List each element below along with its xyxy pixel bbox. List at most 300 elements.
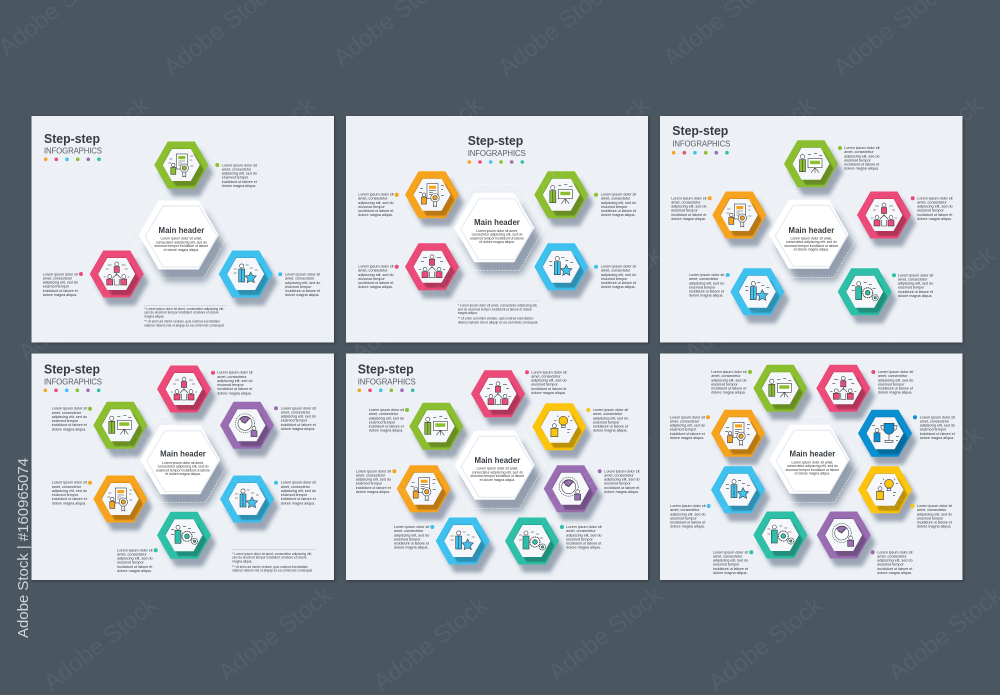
callout: pink — [43, 272, 83, 297]
callout: pink: eiusmod tempor — [358, 277, 386, 281]
main hexagon: et dolore magna aliqua. — [164, 248, 199, 252]
callout: orange: eiusmod tempor — [671, 209, 699, 213]
main hexagon: Lorem ipsum dolor sit amet, — [162, 461, 204, 465]
callout: pink: Lorem ipsum dolor sit — [531, 370, 567, 374]
footnote: magna aliqua. — [458, 311, 478, 315]
callout: yellow: Lorem ipsum dolor sit — [593, 408, 628, 412]
main hexagon: eiusmod tempor incididunt ut labore — [156, 469, 210, 473]
callout: green: incididunt ut labore et — [222, 180, 257, 184]
callout: purple: adipiscing elit, sed do — [281, 415, 316, 419]
callout: blue: eiusmod tempor — [281, 493, 308, 497]
hexagon: yellow bulb — [532, 403, 591, 458]
callout: yellow: amet, consectetur — [917, 508, 947, 512]
main hexagon: eiusmod tempor incididunt ut labore — [471, 474, 524, 478]
callout: teal: dolore magna aliqua. — [898, 294, 932, 298]
callout: blue: Lorem ipsum dolor sit — [670, 504, 706, 508]
footnote: magna aliqua. — [232, 559, 252, 563]
callout: blue: Lorem ipsum dolor sit — [394, 525, 429, 529]
callout: pink: dolore magna aliqua. — [878, 391, 912, 395]
watermark: Adobe Stock — [696, 421, 821, 527]
callout: blue — [274, 481, 316, 505]
hexagon: orange certificate — [711, 410, 770, 465]
panel: seven steps — [346, 354, 648, 580]
callout: yellow: Lorem ipsum dolor sit — [917, 504, 952, 508]
callout: orange: Lorem ipsum dolor sit — [670, 415, 705, 419]
callout: blue — [594, 265, 636, 289]
callout: pink: Lorem ipsum dolor sit — [917, 196, 953, 200]
watermark: Adobe Stock — [30, 421, 155, 527]
callout: green: incididunt ut labore et — [52, 423, 87, 427]
callout: yellow: amet, consectetur — [593, 412, 623, 416]
callout: blue: Lorem ipsum dolor sit — [601, 265, 636, 269]
callout: green — [215, 163, 257, 188]
callout: blue: incididunt ut labore et — [601, 281, 636, 285]
main hexagon: consectetur adipiscing elit, sed do — [787, 464, 838, 468]
hexagon: green presentation — [753, 365, 812, 420]
callout: teal: eiusmod tempor — [713, 563, 740, 567]
callout: green: eiusmod tempor — [222, 176, 249, 180]
main hexagon: consectetur adipiscing elit, sed do — [786, 240, 837, 244]
hexagon: orange certificate — [93, 476, 152, 530]
callout: teal: amet, consectetur — [898, 277, 928, 281]
hexagon: teal gears — [838, 268, 897, 323]
watermark: Adobe Stock — [213, 581, 338, 687]
callout: purple: incididunt ut labore et — [281, 423, 316, 427]
callout: teal: adipiscing elit, sed do — [713, 559, 748, 563]
hexagon: green presentation — [534, 171, 593, 226]
footnote: ullamco laboris nisi ut aliquip ex ea commodo consequat. — [232, 568, 313, 572]
footnote: * Lorem ipsum dolor sit amet, consectetur adipiscing elit, — [144, 307, 224, 311]
main hexagon: eiusmod tempor incididunt ut labore — [155, 244, 208, 248]
callout: blue: dolore magna aliqua. — [689, 294, 723, 298]
watermark: Adobe Stock — [346, 261, 471, 367]
callout: blue: adipiscing elit, sed do — [281, 489, 316, 493]
callout: teal: eiusmod tempor — [566, 537, 594, 541]
callout: dark blue: dolore magna aliqua. — [920, 436, 954, 440]
callout: green — [52, 407, 92, 431]
watermark: Adobe Stock — [863, 91, 988, 197]
callout: blue: incididunt ut labore et — [285, 289, 320, 293]
callout: yellow: adipiscing elit, sed do — [917, 512, 952, 516]
colour dots — [358, 388, 415, 392]
callout: green: adipiscing elit, sed do — [52, 415, 87, 419]
callout: green: eiusmod tempor — [711, 382, 739, 386]
callout: teal: Lorem ipsum dolor sit — [898, 273, 933, 277]
hexagon: pink team — [90, 250, 149, 306]
callout: green: adipiscing elit, sed do — [369, 416, 404, 420]
callout: teal: eiusmod tempor — [898, 286, 925, 290]
callout: dark blue: amet, consectetur — [920, 419, 950, 423]
callout: orange: dolore magna aliqua. — [670, 436, 704, 440]
watermark: Adobe Stock — [196, 421, 321, 527]
callout: pink: amet, consectetur — [358, 269, 388, 273]
colour dots — [44, 388, 100, 392]
footnote: ** Ut enim ad minim veniam, quis nostrud exercitation — [144, 320, 220, 324]
callout: orange: amet, consectetur — [52, 485, 82, 489]
footnote: sed do eiusmod tempor incididunt ut labore et dolore — [144, 311, 219, 315]
callout: pink: amet, consectetur — [917, 200, 947, 204]
callout: green: dolore magna aliqua. — [222, 184, 256, 188]
callout: blue: adipiscing elit, sed do — [601, 273, 636, 277]
callout: orange: incididunt ut labore et — [358, 209, 393, 213]
watermark: Adobe Stock — [30, 91, 155, 197]
footnote: ** Ut enim ad minim veniam, quis nostrud exercitation — [458, 317, 534, 321]
callout: pink: eiusmod tempor — [917, 209, 945, 213]
callout: blue — [670, 504, 711, 529]
callout: green: adipiscing elit, sed do — [222, 172, 257, 176]
watermark: Adobe Stock — [530, 421, 655, 527]
main hexagon: et dolore magna aliqua. — [795, 472, 830, 476]
callout: pink: eiusmod tempor — [217, 383, 245, 387]
hexagon: blue star — [219, 250, 278, 306]
footnote — [458, 301, 540, 325]
callout: orange: amet, consectetur — [671, 200, 701, 204]
callout: orange: eiusmod tempor — [356, 482, 383, 486]
callout: orange: Lorem ipsum dolor sit — [358, 193, 394, 197]
callout: pink: dolore magna aliqua. — [358, 285, 393, 289]
callout: orange: amet, consectetur — [358, 197, 388, 201]
callout: blue: dolore magna aliqua. — [670, 525, 705, 529]
colour dots — [44, 158, 101, 161]
callout: blue: adipiscing elit, sed do — [689, 281, 724, 285]
callout: green: dolore magna aliqua. — [369, 429, 403, 433]
callout: green: Lorem ipsum dolor sit — [52, 407, 87, 411]
main hexagon: et dolore magna aliqua. — [794, 248, 829, 252]
callout: blue: amet, consectetur — [394, 529, 424, 533]
callout: teal: incididunt ut labore et — [713, 567, 748, 571]
callout: teal: dolore magna aliqua. — [713, 571, 747, 575]
watermark: Adobe Stock — [696, 91, 821, 197]
hexagon: orange certificate — [405, 171, 464, 226]
callout: pink: amet, consectetur — [531, 374, 561, 378]
callout: teal — [560, 525, 602, 550]
callout: purple: adipiscing elit, sed do — [877, 559, 913, 563]
main hexagon: Lorem ipsum dolor sit amet, — [791, 460, 833, 464]
main hexagon: et dolore magna aliqua. — [479, 240, 515, 244]
watermark: Adobe Stock — [530, 91, 655, 197]
callout: green: Lorem ipsum dolor sit — [369, 408, 404, 412]
callout: pink — [525, 370, 567, 395]
side credit: Adobe Stock | #160965074 — [15, 458, 32, 638]
callout: pink: amet, consectetur — [43, 276, 73, 280]
callout: orange — [671, 196, 712, 221]
hexagon: pink team — [816, 365, 875, 420]
callout: pink: adipiscing elit, sed do — [917, 205, 953, 209]
panel: three steps — [32, 116, 334, 342]
callout: purple: amet, consectetur — [604, 473, 634, 477]
callout: orange: adipiscing elit, sed do — [671, 205, 707, 209]
footnote — [232, 549, 316, 572]
callout: blue: adipiscing elit, sed do — [394, 533, 429, 537]
main hexagon: Main header — [159, 226, 204, 235]
callout: blue: eiusmod tempor — [285, 285, 312, 289]
callout: orange: adipiscing elit, sed do — [356, 478, 391, 482]
callout: yellow — [910, 504, 952, 529]
callout: pink: eiusmod tempor — [43, 285, 70, 289]
callout: orange — [358, 193, 399, 217]
callout: orange: amet, consectetur — [670, 419, 700, 423]
callout: orange: adipiscing elit, sed do — [670, 424, 705, 428]
callout: green: Lorem ipsum dolor sit — [844, 146, 880, 150]
heading: Step-step — [44, 131, 100, 146]
callout: pink: adipiscing elit, sed do — [43, 281, 78, 285]
main hexagon: eiusmod tempor incididunt ut labore — [786, 468, 839, 472]
hexagon: blue star — [220, 476, 279, 530]
callout: green: adipiscing elit, sed do — [601, 201, 636, 205]
watermark: Adobe Stock — [363, 91, 488, 197]
callout: blue: amet, consectetur — [670, 508, 700, 512]
heading: INFOGRAPHICS — [44, 147, 102, 156]
hexagon: purple clock — [220, 402, 279, 457]
callout: green — [838, 146, 880, 171]
footnote: sed do eiusmod tempor incididunt ut labore et dolore — [458, 307, 532, 311]
callout: blue: Lorem ipsum dolor sit — [285, 273, 320, 277]
footnote: ** Ut enim ad minim veniam, quis nostrud exercitation — [232, 565, 308, 569]
callout: pink: adipiscing elit, sed do — [217, 379, 253, 383]
callout: green: incididunt ut labore et — [369, 425, 404, 429]
callout: purple — [871, 550, 913, 575]
callout: orange: dolore magna aliqua. — [52, 501, 86, 505]
callout: blue: Lorem ipsum dolor sit — [689, 273, 724, 277]
main hexagon: et dolore magna aliqua. — [165, 472, 201, 476]
callout: orange: incididunt ut labore et — [356, 486, 391, 490]
callout: blue — [689, 273, 730, 298]
callout: pink: dolore magna aliqua. — [531, 391, 566, 395]
callout: blue: dolore magna aliqua. — [394, 546, 428, 550]
watermark: Adobe Stock — [210, 241, 335, 347]
main hexagon: eiusmod tempor incididunt ut labore — [785, 244, 838, 248]
callout: green: eiusmod tempor — [844, 158, 872, 162]
callout: pink: incididunt ut labore et — [43, 289, 78, 293]
callout: purple: dolore magna aliqua. — [877, 571, 912, 575]
callout: pink: incididunt ut labore et — [531, 387, 566, 391]
hexagon: pink team — [157, 366, 216, 420]
panel: five steps — [660, 116, 962, 342]
callout: green: adipiscing elit, sed do — [711, 378, 747, 382]
watermark: Adobe Stock — [543, 241, 668, 347]
callout: purple: eiusmod tempor — [281, 419, 308, 423]
callout: green: incididunt ut labore et — [844, 163, 879, 167]
hexagon: pink team — [857, 192, 916, 246]
callout: teal: adipiscing elit, sed do — [898, 282, 933, 286]
hexagon: blue star — [534, 243, 593, 298]
callout: green: amet, consectetur — [222, 167, 252, 171]
callout: teal: Lorem ipsum dolor sit — [713, 550, 748, 554]
watermark: Adobe Stock — [679, 261, 804, 367]
callout: green: incididunt ut labore et — [711, 387, 746, 391]
callout: green: dolore magna aliqua. — [711, 391, 746, 395]
callout: teal — [713, 550, 753, 575]
heading: INFOGRAPHICS — [468, 149, 526, 158]
callout: purple: eiusmod tempor — [604, 482, 632, 486]
main hexagon: Main header — [160, 450, 206, 459]
callout: dark blue: adipiscing elit, sed do — [920, 424, 955, 428]
callout: green: dolore magna aliqua. — [52, 427, 86, 431]
callout: blue: amet, consectetur — [285, 277, 315, 281]
callout: yellow: eiusmod tempor — [917, 516, 944, 520]
callout: pink: amet, consectetur — [878, 374, 908, 378]
callout: blue: eiusmod tempor — [601, 277, 628, 281]
callout: purple: amet, consectetur — [877, 554, 907, 558]
callout: green: dolore magna aliqua. — [844, 167, 879, 171]
callout: orange: dolore magna aliqua. — [671, 217, 706, 221]
callout: purple — [274, 406, 316, 431]
main hexagon — [130, 417, 230, 506]
callout: blue: dolore magna aliqua. — [601, 285, 635, 289]
callout: teal — [892, 273, 933, 298]
callout: teal: amet, consectetur — [117, 552, 147, 556]
footnote: magna aliqua. — [144, 314, 164, 318]
main hexagon — [445, 422, 545, 512]
main hexagon: consectetur adipiscing elit, sed do — [158, 465, 209, 469]
callout: green: eiusmod tempor — [52, 419, 79, 423]
callout: teal: incididunt ut labore et — [117, 565, 152, 569]
callout: yellow: eiusmod tempor — [593, 420, 620, 424]
callout: teal: adipiscing elit, sed do — [117, 557, 153, 561]
callout: green: amet, consectetur — [601, 197, 631, 201]
main hexagon: Lorem ipsum dolor sit amet, — [160, 237, 202, 241]
hexagon: teal gears — [157, 512, 216, 567]
heading — [468, 133, 526, 158]
callout: purple: eiusmod tempor — [877, 563, 905, 567]
callout: orange — [52, 481, 92, 505]
hexagon: green presentation — [93, 402, 152, 457]
callout: orange: incididunt ut labore et — [671, 213, 706, 217]
callout: blue: eiusmod tempor — [394, 537, 421, 541]
callout: pink — [211, 371, 253, 395]
callout: purple: Lorem ipsum dolor sit — [604, 469, 640, 473]
callout: green: dolore magna aliqua. — [601, 213, 635, 217]
heading: INFOGRAPHICS — [358, 378, 416, 387]
callout: blue: adipiscing elit, sed do — [285, 281, 320, 285]
heading: Step-step — [44, 361, 100, 376]
panel: eight steps — [660, 354, 962, 580]
callout: pink: adipiscing elit, sed do — [358, 273, 394, 277]
callout: pink: incididunt ut labore et — [217, 387, 252, 391]
watermark: Adobe Stock — [543, 581, 668, 687]
callout: orange: Lorem ipsum dolor sit — [356, 469, 391, 473]
callout: purple: dolore magna aliqua. — [604, 490, 639, 494]
callout: blue: amet, consectetur — [601, 269, 631, 273]
callout: purple: incididunt ut labore et — [877, 567, 912, 571]
callout: yellow — [586, 408, 628, 433]
callout: green: eiusmod tempor — [369, 420, 396, 424]
callout: pink — [911, 196, 953, 221]
main hexagon: Lorem ipsum dolor sit amet, — [476, 229, 518, 233]
callout: pink: eiusmod tempor — [531, 383, 559, 387]
hexagon: orange certificate — [712, 192, 771, 246]
heading — [672, 123, 730, 148]
callout: orange: adipiscing elit, sed do — [358, 201, 394, 205]
main hexagon: eiusmod tempor incididunt ut labore — [470, 236, 524, 240]
callout: green — [369, 408, 409, 433]
panel: six steps — [32, 354, 334, 580]
main hexagon: consectetur adipiscing elit, sed do — [472, 470, 523, 474]
callout: green — [711, 370, 752, 395]
hexagon: purple clock — [817, 512, 876, 566]
callout: teal: dolore magna aliqua. — [117, 569, 152, 573]
callout: teal: Lorem ipsum dolor sit — [117, 548, 153, 552]
callout: green: amet, consectetur — [369, 412, 399, 416]
callout: blue: amet, consectetur — [689, 277, 719, 281]
callout: purple: incididunt ut labore et — [604, 486, 639, 490]
watermark: Adobe Stock — [863, 421, 988, 527]
callout: green: eiusmod tempor — [601, 205, 628, 209]
footnote: sed do eiusmod tempor incididunt ut labore et dolore — [232, 556, 307, 560]
watermark: Adobe Stock — [876, 241, 1000, 347]
callout: blue: dolore magna aliqua. — [285, 293, 319, 297]
footnote: * Lorem ipsum dolor sit amet, consectetur adipiscing elit, — [458, 304, 538, 308]
hexagon: purple clock — [544, 465, 603, 520]
hexagon: pink team — [471, 370, 530, 425]
callout: orange: eiusmod tempor — [670, 428, 697, 432]
callout: green: amet, consectetur — [711, 374, 741, 378]
callout: yellow: incididunt ut labore et — [917, 521, 952, 525]
heading — [44, 361, 102, 387]
heading: Step-step — [468, 133, 523, 148]
main hexagon: Main header — [475, 456, 520, 465]
callout: orange: dolore magna aliqua. — [358, 213, 393, 217]
main hexagon: Main header — [474, 218, 520, 227]
callout: green: amet, consectetur — [52, 411, 82, 415]
watermark: Adobe Stock — [196, 91, 321, 197]
callout: blue: incididunt ut labore et — [394, 542, 429, 546]
callout: yellow: dolore magna aliqua. — [593, 429, 627, 433]
watermark: Adobe Stock — [703, 591, 828, 695]
callout: teal: incididunt ut labore et — [898, 290, 933, 294]
callout: blue: incididunt ut labore et — [670, 521, 705, 525]
callout: pink: incididunt ut labore et — [358, 281, 393, 285]
callout: blue: adipiscing elit, sed do — [670, 512, 706, 516]
callout: purple: Lorem ipsum dolor sit — [877, 550, 913, 554]
callout: blue — [278, 272, 320, 297]
callout: pink: eiusmod tempor — [878, 382, 905, 386]
callout: pink: incididunt ut labore et — [878, 387, 913, 391]
footnote: ullamco laboris nisi ut aliquip ex ea commodo consequat. — [144, 324, 225, 328]
callout: teal: Lorem ipsum dolor sit — [566, 525, 602, 529]
callout: blue: incididunt ut labore et — [281, 497, 316, 501]
callout: dark blue: Lorem ipsum dolor sit — [920, 415, 955, 419]
main hexagon: consectetur adipiscing elit, sed do — [156, 240, 207, 244]
callout: orange — [356, 469, 396, 494]
callout: orange: adipiscing elit, sed do — [52, 489, 87, 493]
callout: orange: eiusmod tempor — [358, 205, 386, 209]
main hexagon: Lorem ipsum dolor sit amet, — [790, 236, 832, 240]
callout: orange: dolore magna aliqua. — [356, 490, 390, 494]
heading: Step-step — [358, 361, 414, 376]
hexagon: green certificate — [154, 142, 213, 196]
callout: green: incididunt ut labore et — [601, 209, 636, 213]
callout: purple — [598, 469, 640, 494]
main hexagon — [760, 416, 860, 506]
callout: orange: Lorem ipsum dolor sit — [671, 196, 707, 200]
callout: pink: adipiscing elit, sed do — [531, 379, 567, 383]
callout: blue: amet, consectetur — [281, 485, 311, 489]
callout: green — [594, 193, 636, 217]
hexagon: blue star — [730, 268, 789, 323]
callout: yellow: incididunt ut labore et — [593, 425, 628, 429]
callout: pink: Lorem ipsum dolor sit — [358, 265, 394, 269]
callout: yellow: adipiscing elit, sed do — [593, 416, 628, 420]
callout: orange: amet, consectetur — [356, 473, 386, 477]
heading: Step-step — [672, 123, 728, 138]
callout: green: adipiscing elit, sed do — [844, 154, 880, 158]
callout: pink — [871, 370, 913, 395]
hexagon: teal gears — [505, 518, 564, 572]
watermark: Adobe Stock — [13, 261, 138, 367]
colour dots — [468, 160, 524, 164]
main hexagon: Main header — [789, 226, 834, 235]
